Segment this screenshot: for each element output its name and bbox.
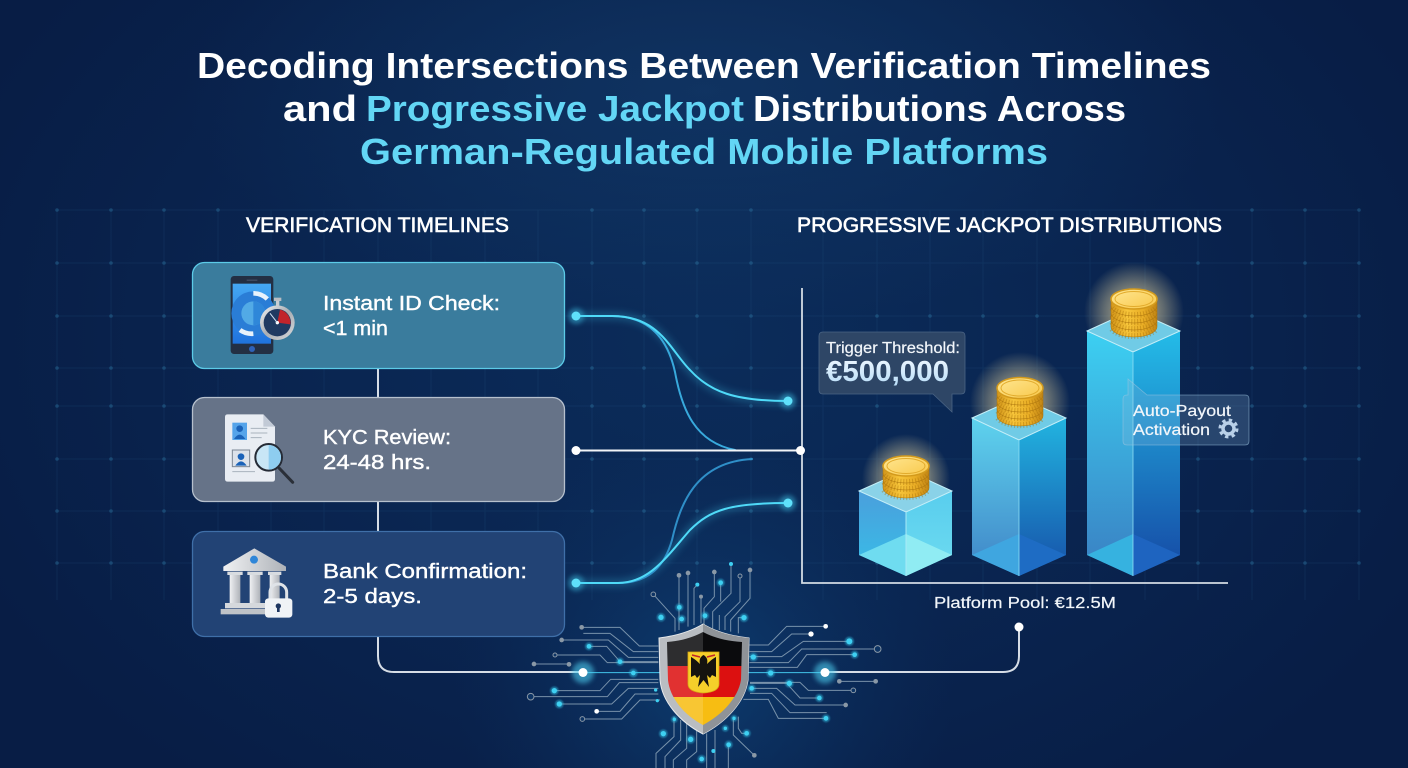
callout: trigger threshold: €500,000 bbox=[826, 356, 949, 388]
curved flow connectors bbox=[576, 316, 788, 583]
card: KYC review bbox=[192, 398, 564, 502]
card text bbox=[323, 426, 451, 474]
callout: trigger threshold bbox=[819, 332, 965, 412]
card: instant ID check bbox=[192, 262, 564, 368]
platform pool label: Platform Pool: €12.5M bbox=[934, 595, 1116, 612]
title: Decoding Intersections Between Verification Timelines bbox=[197, 45, 1211, 86]
title bbox=[197, 45, 1211, 172]
callout: trigger threshold: Trigger Threshold: bbox=[826, 340, 960, 357]
flow nodes bbox=[568, 308, 796, 591]
KYC link line bbox=[572, 446, 805, 455]
callout: auto-payout activation bbox=[1123, 379, 1249, 445]
callout: auto-payout activation: Activation bbox=[1133, 422, 1210, 439]
title: and bbox=[283, 88, 357, 129]
card text: Instant ID Check: bbox=[323, 292, 500, 315]
bar 2 with coins bbox=[970, 352, 1070, 576]
circuit traces bbox=[527, 562, 881, 768]
bar chart bbox=[859, 262, 1184, 576]
title: Progressive Jackpot bbox=[366, 88, 744, 129]
callout: auto-payout activation: Auto-Payout bbox=[1133, 403, 1232, 420]
title: German-Regulated Mobile Platforms bbox=[360, 131, 1048, 172]
card text bbox=[323, 560, 527, 608]
card text: Bank Confirmation: bbox=[323, 560, 527, 583]
heading: progressive jackpot distributions: PROGRESSIVE JACKPOT DISTRIBUTIONS bbox=[797, 214, 1222, 237]
icon: gear bbox=[1220, 420, 1237, 437]
card text bbox=[323, 292, 500, 340]
card text: KYC Review: bbox=[323, 426, 451, 449]
glowing hub nodes bbox=[572, 662, 836, 684]
heading: verification timelines: VERIFICATION TIMELINES bbox=[246, 214, 509, 237]
title: Distributions Across bbox=[753, 88, 1126, 129]
icon: German shield bbox=[659, 624, 750, 734]
pool connector end node bbox=[1014, 622, 1024, 632]
bar 3 with coins bbox=[1084, 262, 1184, 576]
icon: phone with stopwatch bbox=[231, 276, 295, 354]
bar 1 with coins bbox=[859, 434, 952, 576]
card: bank confirmation bbox=[192, 532, 564, 636]
card text: 24-48 hrs. bbox=[323, 451, 431, 474]
timeline connector lines bbox=[378, 369, 1019, 672]
emblem: eagle bbox=[688, 652, 719, 693]
icon: ID documents with magnifier bbox=[225, 414, 293, 482]
chart axes bbox=[802, 288, 1228, 583]
icon: bank with padlock bbox=[221, 548, 292, 618]
card text: <1 min bbox=[323, 317, 388, 340]
card text: 2-5 days. bbox=[323, 585, 422, 608]
